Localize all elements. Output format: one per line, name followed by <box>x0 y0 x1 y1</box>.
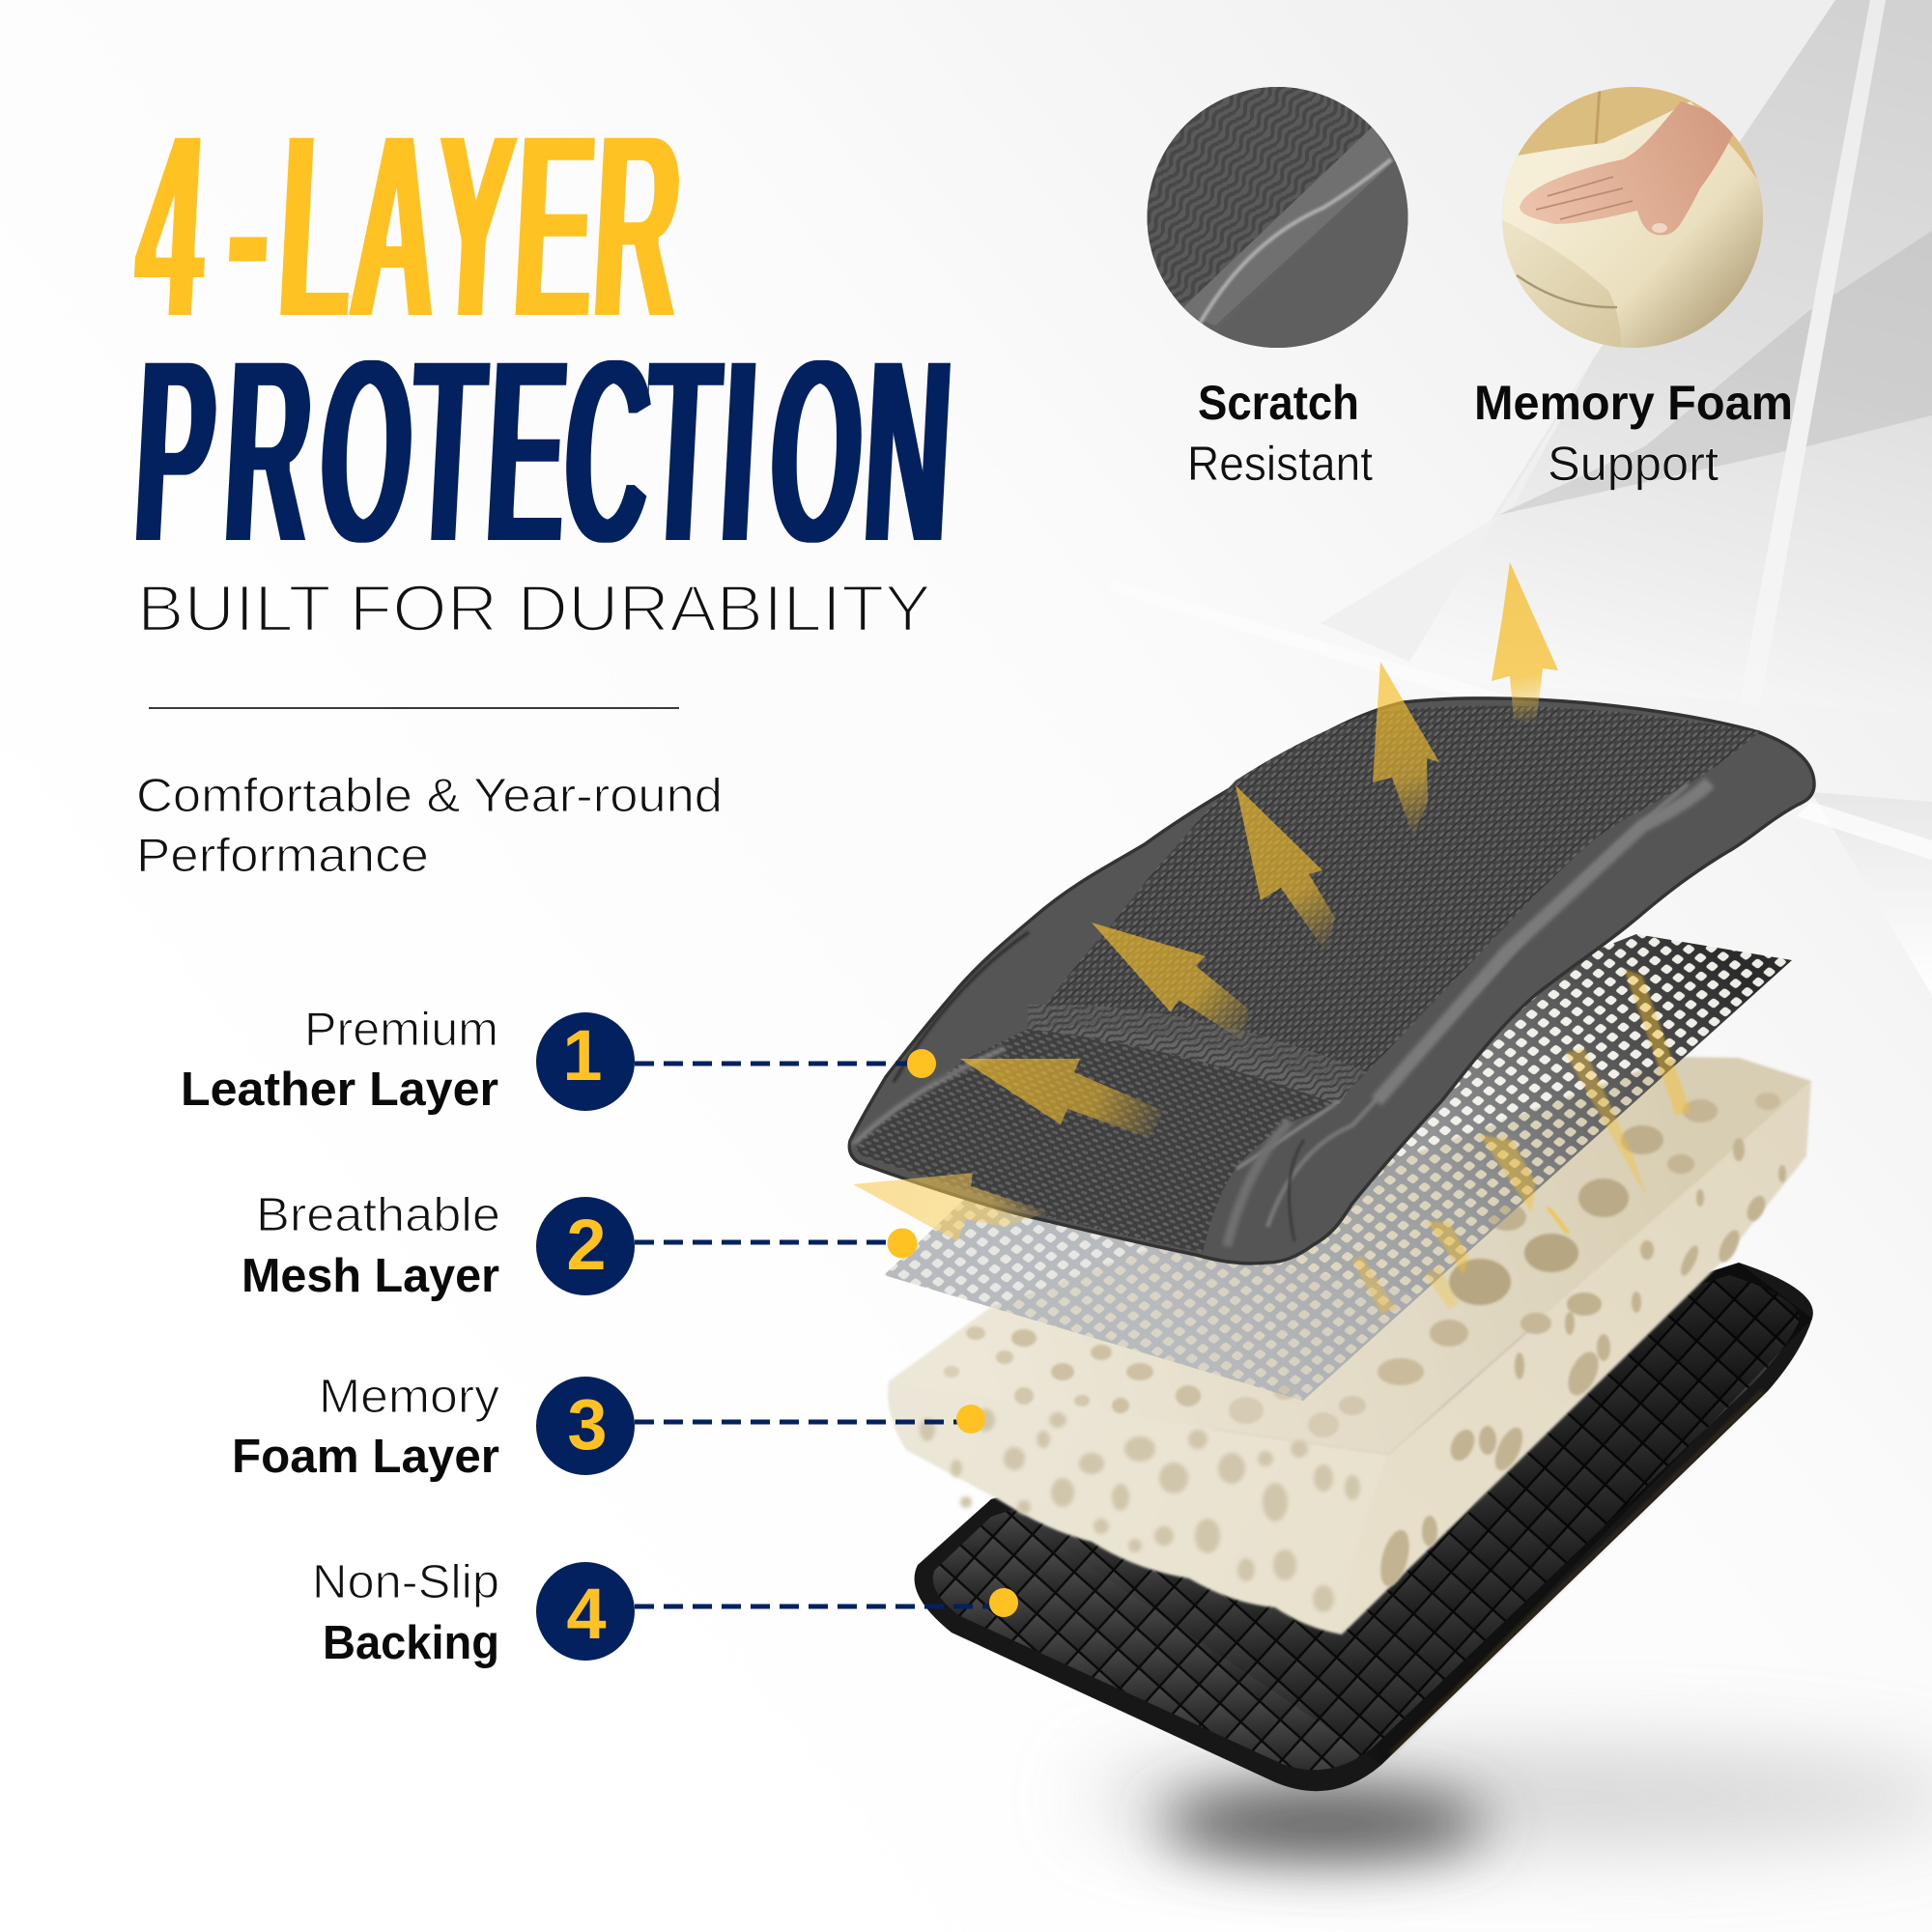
callout 3: foam layer: Memory <box>319 1371 500 1423</box>
photo: hand pressing foam <box>1497 82 1768 357</box>
intro copy: Performance <box>136 830 429 882</box>
arrow 3 <box>1236 785 1335 952</box>
feature: memory foam support: Support <box>1548 437 1719 491</box>
airflow arrows rising through the layers <box>853 562 1558 1241</box>
right-hand seam ridge <box>1267 784 1688 1227</box>
floor shadow beneath the stack <box>1082 1748 1932 1859</box>
callout 3: foam layer: Foam Layer <box>232 1431 499 1483</box>
callout 1: leather layer: Premium <box>304 1004 498 1056</box>
layer 1: premium leather cover <box>849 698 1814 1264</box>
arrow 1 <box>1492 562 1558 724</box>
callout 1: leather layer: Leather Layer <box>181 1064 498 1116</box>
callout 2: mesh layer: Breathable <box>256 1189 500 1241</box>
callout 1: leather layer <box>181 1004 936 1116</box>
callout 4: backing layer: Backing <box>323 1617 499 1669</box>
subtitle: BUILT FOR DURABILITY <box>137 572 931 645</box>
feature: scratch resistant: Scratch <box>1198 376 1359 430</box>
photo: leather seam close-up <box>1148 87 1408 348</box>
feature: memory foam support <box>1474 82 1793 491</box>
callout 2: mesh layer: Mesh Layer <box>242 1250 499 1302</box>
divider rule <box>149 707 679 709</box>
intro copy <box>136 770 723 882</box>
feature: scratch resistant <box>1148 87 1408 481</box>
arrow 4 <box>1092 923 1249 1041</box>
arrow 5 <box>960 1059 1164 1138</box>
feature: scratch resistant: Resistant <box>1187 437 1373 491</box>
callout 2: mesh layer: 2 <box>566 1205 607 1285</box>
arrow 2 <box>1373 662 1439 837</box>
title: PROTECTION: PROTECTION <box>128 302 958 602</box>
woven mesh insert <box>853 706 1759 1253</box>
callout 3: foam layer <box>232 1371 985 1483</box>
callout 3: foam layer: 3 <box>567 1384 608 1464</box>
layer 4: non-slip backing pad <box>915 1263 1813 1791</box>
feature: memory foam support: Memory Foam <box>1474 376 1793 430</box>
callout 2: mesh layer <box>242 1189 918 1302</box>
title: 4-LAYER: 4-LAYER <box>130 77 687 377</box>
callout 4: backing layer: Non-Slip <box>312 1556 499 1608</box>
callout 4: backing layer: 4 <box>566 1574 607 1654</box>
faint airflow streaks through mesh and foam <box>1352 969 1690 1314</box>
callout 1: leather layer: 1 <box>562 1015 603 1095</box>
foam air pockets <box>944 1093 1786 1589</box>
layer 3: memory foam block <box>888 1057 1811 1634</box>
arrow 6 <box>853 1173 1048 1241</box>
callout 4: backing layer <box>312 1556 1018 1669</box>
intro copy: Comfortable & Year-round <box>136 770 723 822</box>
layer 2: perforated breathable mesh <box>884 934 1792 1401</box>
